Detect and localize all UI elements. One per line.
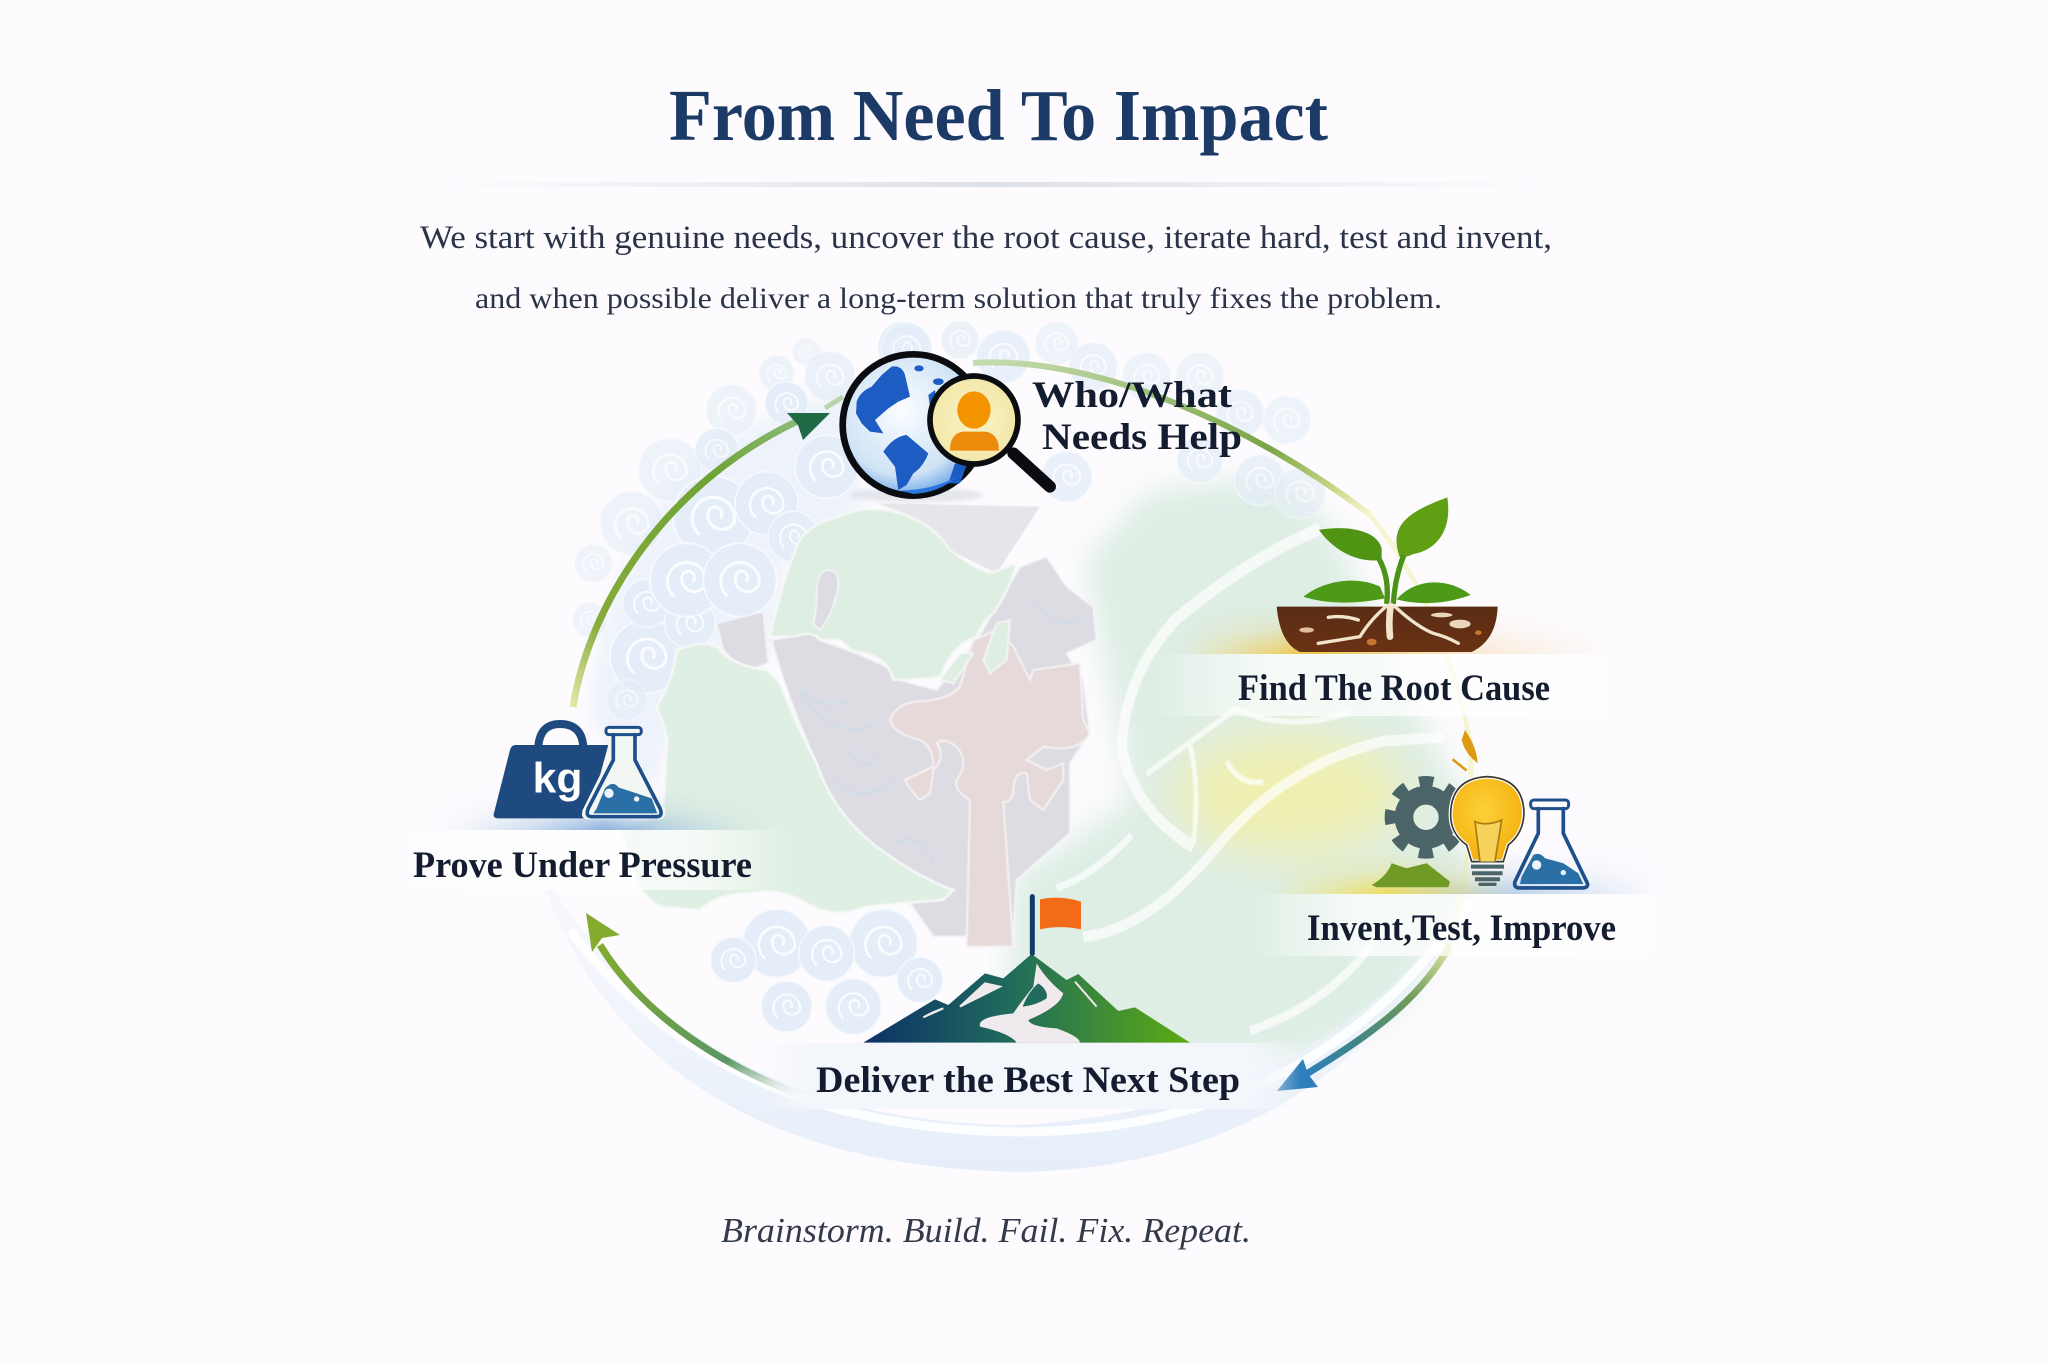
icon: kg weight and flask xyxy=(494,724,665,819)
label: who/what needs help xyxy=(1032,375,1242,458)
step: find the root cause xyxy=(1188,497,1582,716)
cloud base xyxy=(590,390,860,800)
icon: kg weight and flask: kg xyxy=(533,755,582,803)
arrow: top-right arc xyxy=(973,362,1471,950)
icon: mountain with flag xyxy=(863,897,1190,1043)
arrow: left arc to top xyxy=(573,397,843,707)
intro text: and when possible deliver a long-term solution that truly fixes the problem. xyxy=(475,282,1442,315)
icon: globe with magnifier xyxy=(843,354,1050,502)
ground band xyxy=(460,800,742,830)
label: prove under pressure: Prove Under Pressure xyxy=(413,845,752,886)
ground band xyxy=(1278,854,1640,894)
label: who/what needs help: Needs Help xyxy=(1042,417,1242,458)
intro text xyxy=(420,220,1552,315)
step: prove under pressure xyxy=(414,720,752,890)
label: find the root cause: Find The Root Cause xyxy=(1238,668,1550,709)
right green wash xyxy=(1010,475,1465,1060)
arrow: bottom-right arc xyxy=(1277,945,1450,1091)
tagline: Brainstorm. Build. Fail. Fix. Repeat. xyxy=(721,1211,1251,1250)
step: deliver the best next step xyxy=(760,897,1300,1109)
icon: sprout with roots xyxy=(1277,497,1498,652)
land masses xyxy=(620,503,1097,947)
arrow: bottom-left arc xyxy=(586,913,800,1095)
icon: gear, bulb, flask xyxy=(1372,730,1588,888)
cloud swirls upper right xyxy=(881,321,1325,519)
intro text: We start with genuine needs, uncover the root cause, iterate hard, test and invent, xyxy=(420,220,1552,256)
cloud swirls lower left xyxy=(711,909,943,1034)
pale yellow wash xyxy=(1175,735,1405,855)
background world map and cloud swirls xyxy=(535,321,1530,1172)
step: who/what needs help xyxy=(843,354,1242,502)
label: who/what needs help: Who/What xyxy=(1032,375,1233,416)
label: invent, test, improve: Invent,Test, Improve xyxy=(1307,908,1616,949)
white veins xyxy=(1057,529,1443,1031)
ground band xyxy=(1188,612,1582,654)
lower crescent swoosh xyxy=(535,760,1530,1172)
label band xyxy=(760,1043,1300,1109)
label: deliver the best next step: Deliver the Best Next Step xyxy=(816,1060,1240,1101)
step: invent, test, improve xyxy=(1278,730,1640,956)
title: From Need To Impact xyxy=(669,75,1328,156)
cloud swirls upper left xyxy=(572,321,929,720)
